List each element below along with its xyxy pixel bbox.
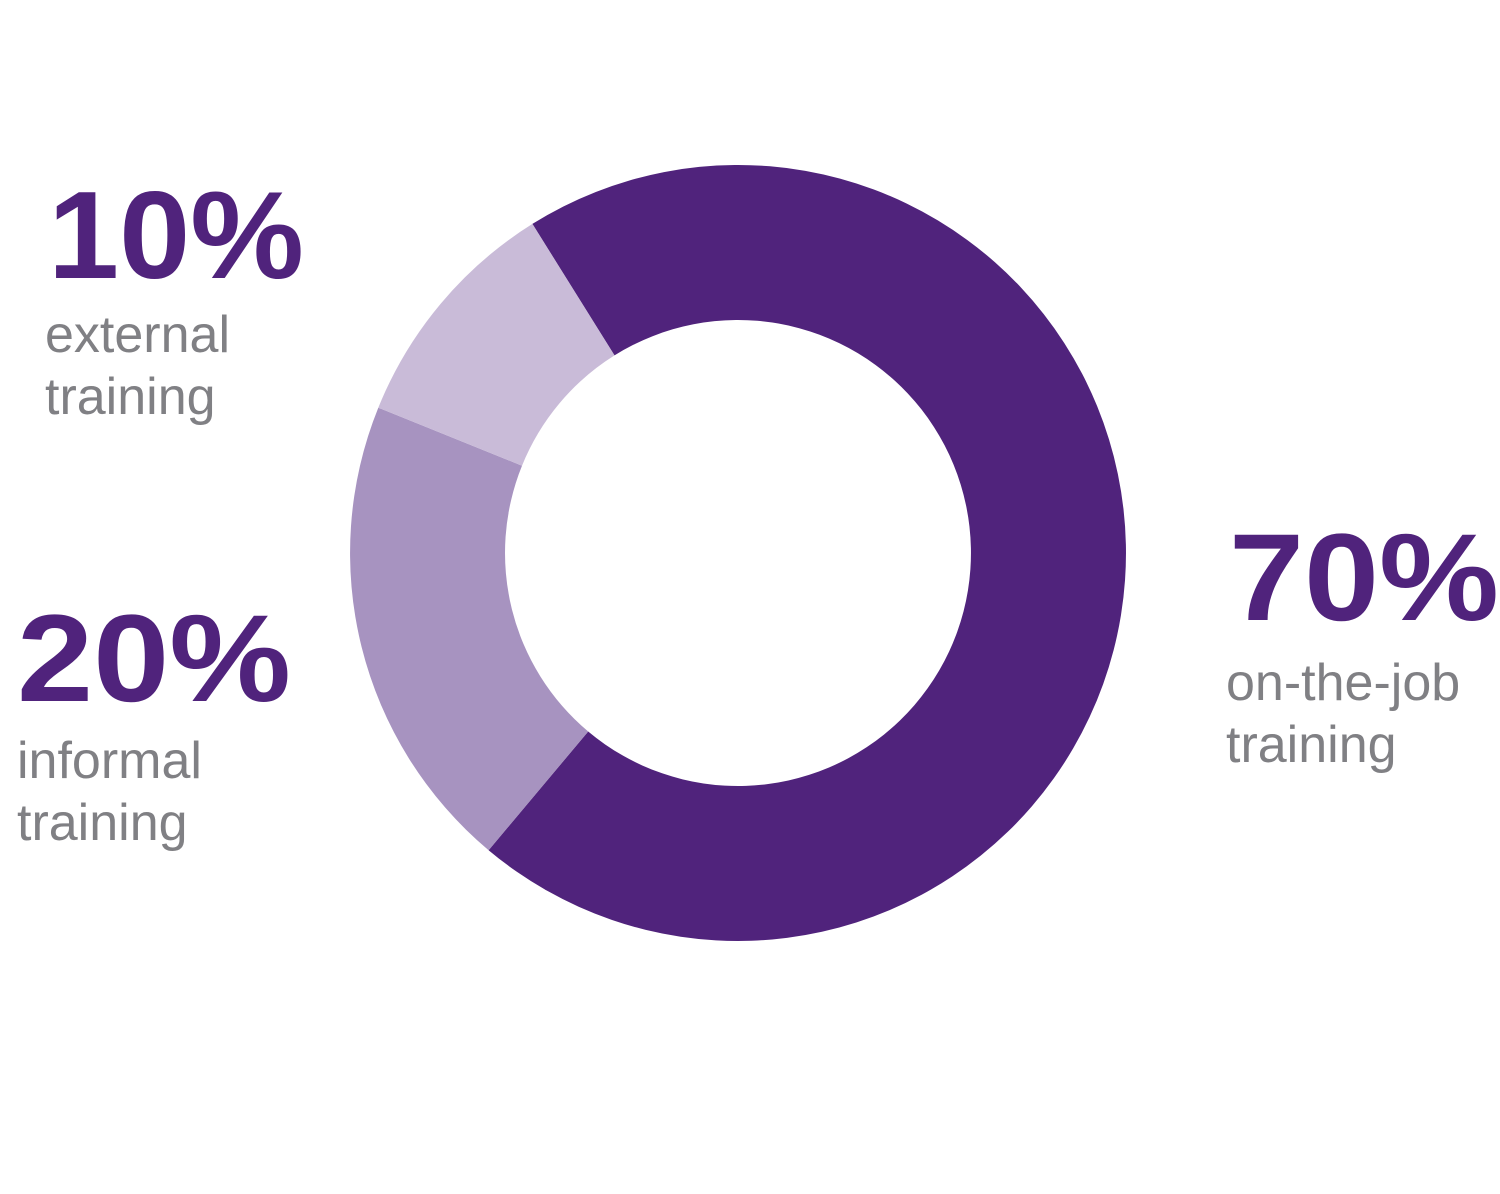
segment: 10% external: [378, 224, 614, 466]
segment: 20% informal: [350, 408, 588, 850]
label: 10% external training: [45, 167, 304, 426]
label: 20% informal training: 20%: [17, 590, 291, 728]
label: 70% on-the-job training: 70%: [1229, 509, 1499, 647]
donut chart: [350, 165, 1126, 941]
label: 70% on-the-job training: [1226, 509, 1499, 774]
label: 20% informal training: training: [17, 794, 188, 852]
segment: 70% on-the-job: [489, 165, 1126, 941]
label: 70% on-the-job training: training: [1226, 716, 1397, 774]
label: 70% on-the-job training: on-the-job: [1226, 654, 1460, 712]
label: 20% informal training: [17, 590, 291, 852]
label: 10% external training: training: [45, 368, 216, 426]
label: 10% external training: external: [45, 306, 230, 364]
label: 10% external training: 10%: [48, 167, 304, 305]
label: 20% informal training: informal: [17, 732, 202, 790]
